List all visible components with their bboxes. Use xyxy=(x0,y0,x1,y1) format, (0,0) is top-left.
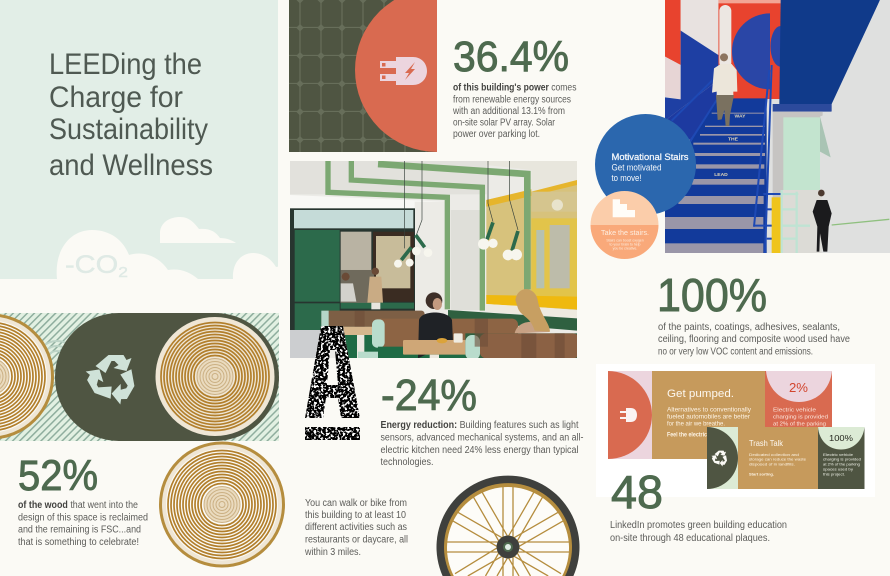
panel: solar array xyxy=(289,0,437,152)
plaque: get pumped: for the air we breathe. xyxy=(667,422,725,428)
callout: take the stairs: Stairs can boost oxygen xyxy=(606,238,644,242)
stat text: of the paints, coatings, adhesives, sealants, xyxy=(658,322,840,333)
stat text: from renewable energy sources xyxy=(453,94,571,106)
handrails xyxy=(672,65,782,253)
title text xyxy=(49,48,213,182)
stat: 48: 48 xyxy=(611,466,663,518)
stat text: LinkedIn promotes green building education xyxy=(610,520,787,531)
text: walk or bike: within 3 miles. xyxy=(304,547,361,558)
stat: -24%: -24% xyxy=(381,371,477,420)
stat text: with an additional 13.1% from xyxy=(452,106,565,117)
woman right xyxy=(515,322,550,333)
landing xyxy=(772,112,823,198)
icon: bicycle wheel xyxy=(436,476,580,576)
stat text: on-site through 48 educational plaques. xyxy=(610,533,770,544)
soffit xyxy=(779,0,880,104)
plaque: get pumped: at 2% of the parking xyxy=(773,422,826,428)
plaque: trash talk: this project. xyxy=(823,472,845,476)
lamps xyxy=(405,161,518,248)
title text: LEEDing the xyxy=(49,48,202,81)
callout: take the stairs: you be creative. xyxy=(613,246,637,250)
title text: Sustainability xyxy=(49,113,208,146)
stat text: on-site solar PV array. Solar xyxy=(453,118,556,128)
front booth xyxy=(465,333,579,360)
plaque: get pumped: charging is provided xyxy=(773,414,828,420)
plaque: trash talk: 100% xyxy=(829,433,853,443)
clouds xyxy=(57,217,288,279)
title text: and Wellness xyxy=(49,149,213,182)
stat: 52%: 52% xyxy=(18,452,98,500)
text: walk or bike: restaurants or daycare, all xyxy=(305,534,408,546)
stencil letter A xyxy=(305,326,360,440)
stat text: and the remaining is FSC...and xyxy=(18,524,141,536)
stat text xyxy=(610,520,787,544)
booths xyxy=(290,330,320,358)
plaque: trash talk: Start sorting. xyxy=(749,472,774,476)
plaque: get pumped: Get pumped. xyxy=(667,388,734,400)
stat: 36.4% xyxy=(452,33,577,140)
plaque: trash talk: charging is provided xyxy=(823,456,861,462)
callout: motivational stairs: to move! xyxy=(612,173,642,183)
stair words: THE xyxy=(728,137,739,143)
plaque: trash talk: Trash Talk xyxy=(749,439,784,448)
callout: motivational stairs xyxy=(595,114,696,215)
stat text: power over parking lot. xyxy=(453,129,540,140)
person on landing xyxy=(813,200,832,252)
plaque: trash talk: storage can reduce the waste xyxy=(749,456,806,462)
stat text xyxy=(452,82,577,140)
stat: -24% xyxy=(380,371,584,468)
stat text xyxy=(658,322,850,358)
text: walk or bike: different activities such as xyxy=(305,522,407,533)
wood slice: pill xyxy=(156,317,274,436)
photo: motivational stairs xyxy=(665,0,890,253)
photo: cafe interior xyxy=(288,160,588,360)
plaque: get pumped: Electric vehicle xyxy=(773,408,816,414)
panel: reclaimed wood band xyxy=(0,313,279,441)
person on stairs xyxy=(716,95,734,126)
callout: take the stairs: to your brain to help xyxy=(610,242,641,246)
text: walk or bike xyxy=(304,498,408,558)
panel: plaques card xyxy=(596,364,875,497)
plaque: get pumped: Feel the electric xyxy=(667,432,708,438)
stat text: ceiling, flooring and composite wood used have xyxy=(658,334,850,345)
stat text: design of this space is reclaimed xyxy=(18,512,148,524)
dark pill xyxy=(55,313,279,441)
wood slice: lower xyxy=(160,443,284,566)
plaque: trash talk xyxy=(707,427,864,489)
plaque: trash talk: Dedicated collection and xyxy=(749,452,799,457)
callout: motivational stairs: Motivational Stairs xyxy=(612,152,689,162)
plaque: trash talk: spaces used by xyxy=(823,466,853,472)
stair run xyxy=(665,98,767,253)
cabin xyxy=(290,208,415,330)
stat text: no or very low VOC content and emissions. xyxy=(658,346,813,358)
icon: plug xyxy=(380,57,427,85)
stat text xyxy=(18,500,148,548)
stair words: WAY xyxy=(735,114,746,120)
stat: 52% xyxy=(18,452,148,548)
plaque: trash talk: at 2% of the parking xyxy=(823,462,860,466)
callout: motivational stairs: Get motivated xyxy=(612,162,662,172)
stat text xyxy=(380,420,584,468)
callout: take the stairs xyxy=(590,191,658,259)
stat text: of this building's power comes xyxy=(453,82,577,94)
stat: 100% xyxy=(657,269,850,358)
stat text: that is something to celebrate! xyxy=(18,537,139,548)
woman left xyxy=(418,312,453,358)
icon: steps xyxy=(613,199,635,217)
stat: 36.4%: 36.4% xyxy=(453,33,569,81)
plaque: get pumped: fueled automobiles are better xyxy=(667,414,750,420)
stat text: technologies. xyxy=(380,457,434,468)
CO2 label: -CO xyxy=(65,251,111,279)
stair words xyxy=(714,114,746,178)
text: walk or bike: You can walk or bike from xyxy=(305,498,407,509)
plaque: get pumped: Alternatives to conventionally xyxy=(667,408,751,414)
plaque: get pumped: 2% xyxy=(789,380,808,395)
callout: take the stairs: Take the stairs. xyxy=(601,230,649,237)
plaque: get pumped xyxy=(608,371,832,459)
stat text: of the wood that went into the xyxy=(18,500,138,511)
text: walk or bike: this building to at least 10 xyxy=(305,510,407,521)
panel: title xyxy=(0,0,288,281)
stat: 48 xyxy=(610,466,787,544)
title text: Charge for xyxy=(49,81,183,114)
stat: 100%: 100% xyxy=(657,269,767,321)
CO2 label: 2 xyxy=(118,264,128,281)
stat text: sensors, advanced mechanical systems, and an all- xyxy=(380,432,584,444)
stat text: Energy reduction: Building features such as light xyxy=(380,420,579,431)
plaque: trash talk: disposed of in landfills. xyxy=(749,462,795,466)
stair words: LEAD xyxy=(714,172,728,178)
icon: recycle xyxy=(83,355,141,406)
wood slice: left xyxy=(0,315,52,438)
stat text: electric kitchen need 24% less energy than typical xyxy=(380,445,578,456)
plaque: trash talk: Electric vehicle xyxy=(823,452,853,457)
